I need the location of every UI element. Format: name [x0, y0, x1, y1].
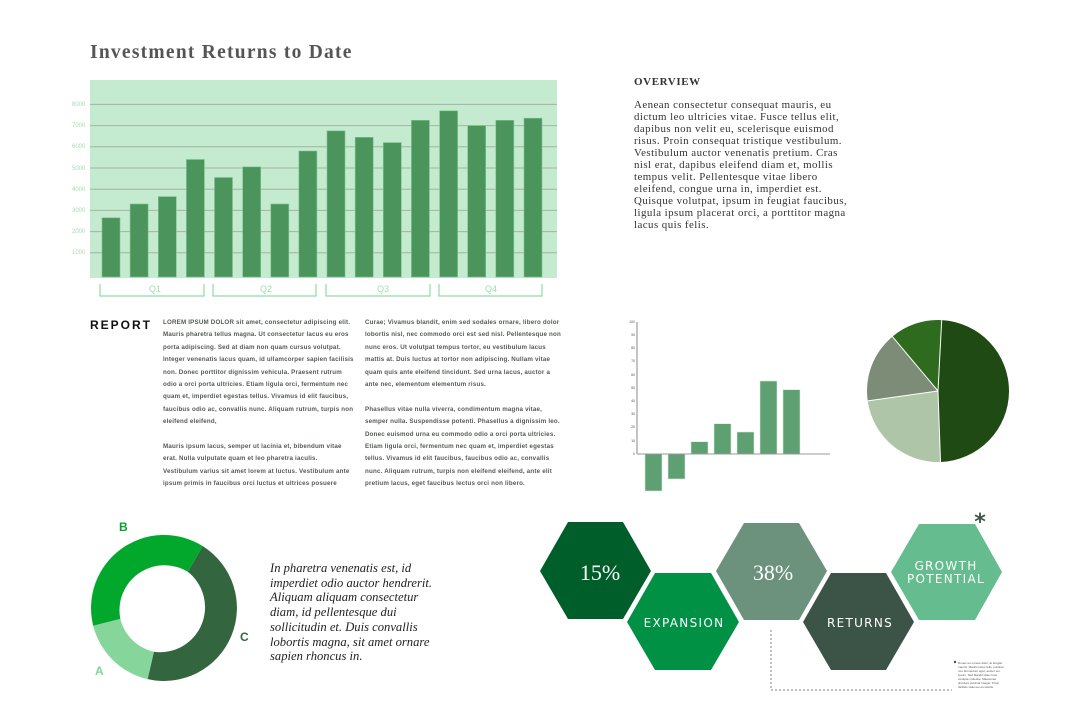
footnote: tincidunt pulvinar integer. Proin [958, 681, 999, 685]
overview heading: OVERVIEW [634, 76, 701, 88]
small bar chart: 100 [629, 320, 635, 324]
main bar chart: Q3 [377, 284, 389, 294]
overview text: Vestibulum auctor venenatis pretium. Cras [634, 147, 838, 159]
report column 2: lobortis nisl, nec commodo orci est sed nisl. Pellentesque non [365, 331, 561, 338]
main bar chart: 1000 [72, 250, 86, 256]
footnote: facilisis vitae leo eu iaculis. [958, 685, 994, 689]
overview text: dictum leo ultricies vitae. Fusce tellus elit, [634, 111, 839, 123]
overview text: Quisque volutpat, ipsum in feugiat faucibus, [634, 195, 847, 207]
small bar chart: 20 [631, 425, 635, 429]
asterisk: * [974, 510, 986, 535]
footnote: Donec eu cursus dolor, at feugiat [958, 661, 1002, 665]
report column 1: ipsum primis in faucibus orci luctus et ultrices posuere [163, 480, 337, 487]
overview text: risus. Proin consequat tristique vestibulum. [634, 135, 842, 147]
main bar chart: 4000 [72, 187, 86, 193]
italic paragraph: diam, id pellentesque dui [270, 605, 397, 619]
report heading: REPORT [90, 318, 152, 332]
report column 2: nunc eros. Ut volutpat tempus tortor, eu vestibulum lacus [365, 344, 546, 351]
report column 1: erat. Nulla vulputate quam et leo pharetra iaculis. [163, 455, 318, 462]
report column 2: Etiam ligula orci, fermentum nec quam et, imperdiet egestas [365, 443, 554, 450]
report column 1: Vestibulum varius sit amet lorem at luctus. Vestibulum ante [163, 468, 349, 475]
main bar chart: Q1 [149, 284, 161, 294]
donut chart: B [119, 520, 128, 534]
main bar chart: Q2 [260, 284, 272, 294]
hexagon cluster [540, 510, 1004, 691]
report column 1 [163, 319, 354, 487]
overview text: eleifend, congue urna in, imperdiet est. [634, 183, 822, 195]
italic paragraph: imperdiet odio auctor hendrerit. [270, 576, 432, 590]
overview text: lacus quis felis. [634, 219, 709, 231]
small bar chart: 60 [631, 373, 635, 377]
report column 1: Mauris ipsum lacus, semper ut lacinia et, bibendum vitae [163, 443, 342, 450]
main bar chart: 6000 [72, 144, 86, 150]
report column 1: quam et, imperdiet egestas tellus. Vivamus id elit faucibus, [163, 393, 348, 400]
hex: returns: RETURNS [827, 616, 893, 630]
report column 2: mattis at. Duis luctus at tortor non adipiscing. Nullam vitae [365, 356, 550, 363]
report column 1: porta adipiscing. Sed at diam non quam cursus volutpat. [163, 344, 341, 351]
title: Investment Returns to Date [90, 42, 353, 63]
main bar chart: 5000 [72, 166, 86, 172]
italic paragraph: Aliquam aliquam consectetur [270, 590, 418, 604]
donut chart: A [95, 664, 104, 678]
small bar chart: 70 [631, 359, 635, 363]
main bar chart: 3000 [72, 208, 86, 214]
report column 2: nunc. Aliquam rutrum, turpis non eleifend eleifend, ante elit [365, 468, 552, 475]
footnote: volutpat molestie. Maecenas [958, 677, 997, 681]
main bar chart: Q4 [485, 284, 497, 294]
italic paragraph: sapien rhoncus in. [270, 649, 362, 663]
report column 2: Phasellus vitae nulla viverra, condimentum magna vitae, [365, 406, 542, 413]
main bar chart: 8000 [72, 102, 86, 108]
small bar chart: 50 [631, 386, 635, 390]
main bar chart [72, 80, 557, 297]
main bar chart: 7000 [72, 123, 86, 129]
report column 2: quam quis ante eleifend tincidunt. Sed urna lacus, auctor a [365, 369, 550, 376]
report column 2 [365, 319, 561, 487]
hex: expansion: EXPANSION [644, 616, 724, 630]
footnote: mauris. Mauris lacus felis, pulvinar [958, 665, 1004, 669]
report column 1: faucibus odio ac, convallis nunc. Aliquam rutrum, turpis non [163, 406, 353, 413]
report column 2: pretium lacus, eget faucibus lectus orci non libero. [365, 480, 525, 487]
small bar chart: 10 [631, 439, 635, 443]
footnote: ipsum. Sed blandit vitae risus [958, 673, 998, 677]
report column 1: LOREM IPSUM DOLOR sit amet, consectetur adipiscing elit. [163, 319, 350, 326]
small bar chart: 40 [631, 399, 635, 403]
report column 2: tellus. Vivamus id elit faucibus, faucibus odio ac, convallis [365, 455, 549, 462]
report column 1: eleifend eleifend, [163, 418, 217, 425]
overview text: tempus velit. Pellentesque vitae libero [634, 171, 818, 183]
report column 1: Mauris pharetra tellus magna. Ut consectetur lacus eu eros [163, 331, 349, 338]
small bar chart: 90 [631, 333, 635, 337]
hex: 38%: 38% [753, 560, 793, 585]
report column 2: Donec euismod urna eu commodo odio a orci porta ultricies. [365, 431, 555, 438]
small bar chart: 30 [631, 412, 635, 416]
donut chart: C [240, 630, 249, 644]
report column 2: ante nec, elementum elementum risus. [365, 381, 486, 388]
small bar chart [629, 320, 830, 492]
small bar chart: 80 [631, 346, 635, 350]
hex: 38% [716, 523, 827, 620]
overview text [634, 99, 847, 231]
pie chart [867, 320, 1009, 462]
italic paragraph: lobortis magna, sit amet ornare [270, 635, 429, 649]
hex: 15% [540, 522, 651, 619]
hex: expansion [627, 573, 739, 670]
overview text: dapibus non velit eu, scelerisque euismod [634, 123, 834, 135]
dotted connector [771, 630, 952, 690]
hex: growth potential [891, 524, 1002, 620]
hex: growth potential: GROWTH [914, 559, 978, 573]
report column 1: odio a orci porta ultricies. Etiam ligula orci, fermentum nec [163, 381, 348, 388]
footnote: non fermentum eget, auctor vel [958, 669, 1000, 673]
donut chart [91, 520, 249, 681]
overview text: nisl erat, dapibus eleifend diam et, mollis [634, 159, 833, 171]
overview text: Aenean consectetur consequat mauris, eu [634, 99, 831, 111]
hex: returns [803, 573, 914, 670]
report column 1: Integer venenatis lacus quam, id ullamcorper sapien facilisis [163, 356, 354, 363]
overview text: ligula ipsum placerat orci, a porttitor magna [634, 207, 846, 219]
report column 1: non. Donec porttitor dignissim vehicula. Praesent rutrum [163, 369, 342, 376]
italic paragraph [269, 561, 432, 663]
report column 2: semper nulla. Suspendisse potenti. Phasellus a dignissim leo. [365, 418, 560, 425]
hex: growth potential: POTENTIAL [907, 572, 985, 586]
hex: 15%: 15% [580, 560, 620, 585]
main bar chart: 2000 [72, 229, 86, 235]
italic paragraph: sollicitudin et. Duis convallis [270, 620, 418, 634]
small bar chart: 0 [633, 452, 635, 456]
italic paragraph: In pharetra venenatis est, id [270, 561, 411, 575]
report column 2: Curae; Vivamus blandit, enim sed sodales ornare, libero dolor [365, 319, 559, 326]
footnote [954, 661, 1004, 689]
